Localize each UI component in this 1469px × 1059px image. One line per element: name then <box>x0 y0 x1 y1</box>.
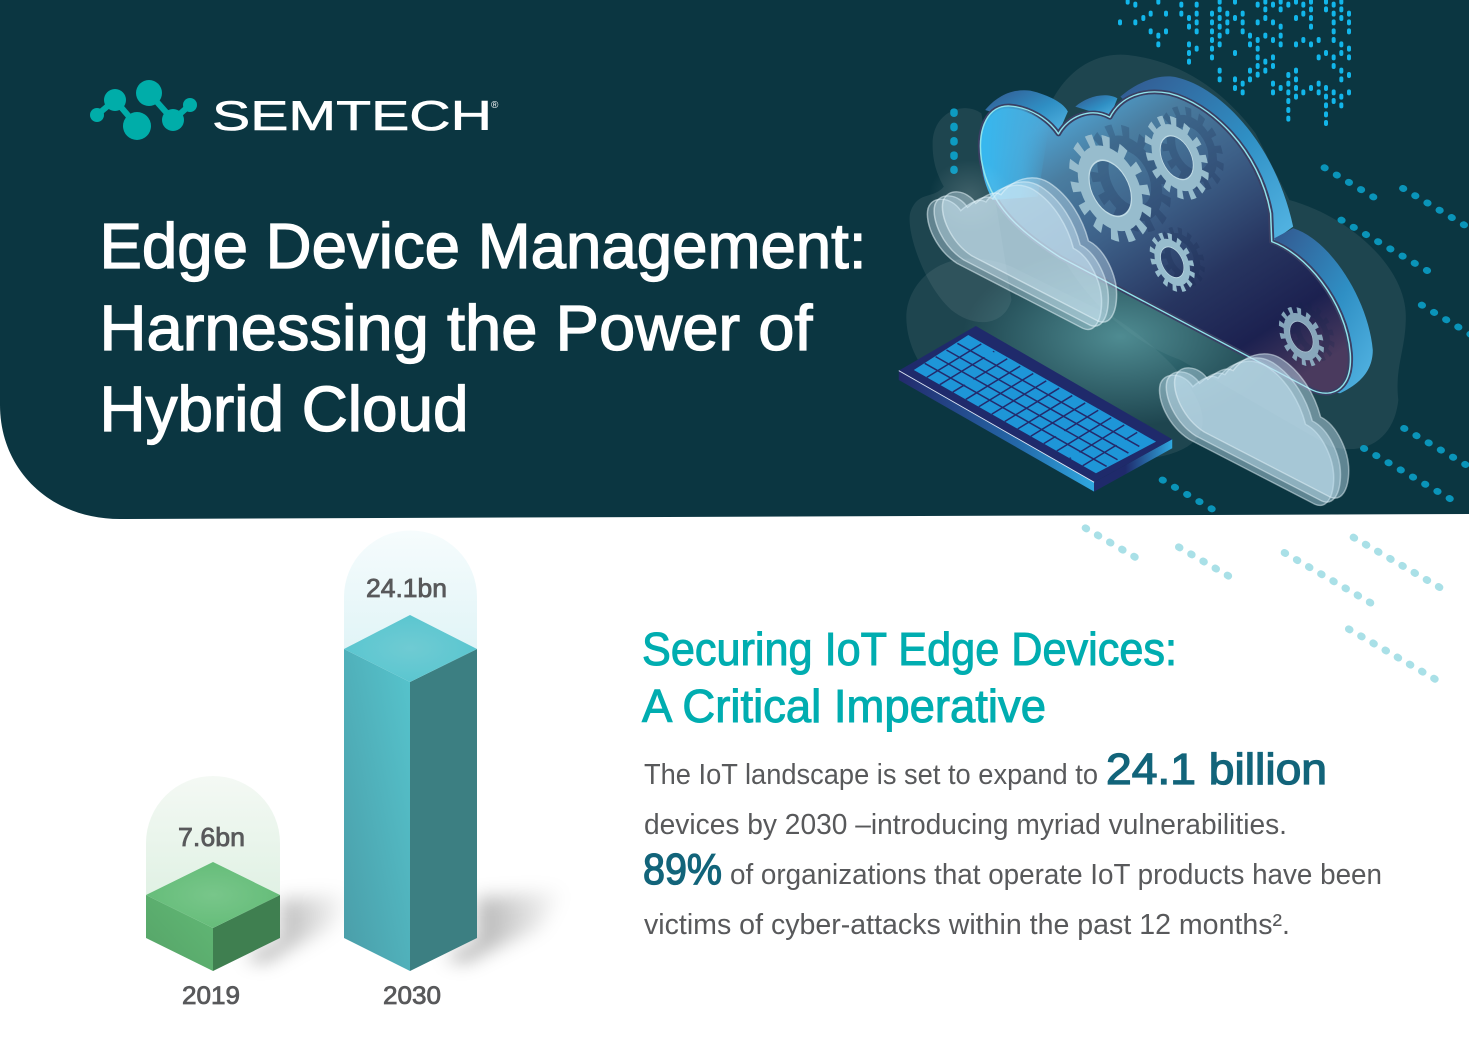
section heading: A Critical Imperative <box>642 680 1046 732</box>
bar 2019 <box>146 776 350 1010</box>
cloud: bright left lobe <box>980 106 1049 200</box>
cloud: extruded side <box>985 76 1373 393</box>
title: Edge Device Management: <box>100 210 866 282</box>
wide keys <box>930 346 1147 471</box>
illustration: hybrid cloud <box>899 55 1469 509</box>
stat: 24.1 billion: 24.1 billion <box>1106 745 1327 794</box>
value: 24.1bn <box>366 573 447 603</box>
dome <box>146 776 280 928</box>
bar shadow <box>445 890 565 962</box>
keyboard <box>899 326 1172 492</box>
year: 2019 <box>182 982 240 1010</box>
registered mark: ® <box>491 100 499 111</box>
logo: Semtech <box>90 80 499 140</box>
wordmark: SEMTECH <box>212 92 492 139</box>
cloud: front face <box>980 92 1350 393</box>
light dots below header <box>1085 528 1441 680</box>
dome <box>344 530 477 682</box>
title <box>100 210 866 445</box>
title: Harnessing the Power of <box>100 292 813 364</box>
body text with statistics: devices by 2030 –introducing myriad vulnerabilities. <box>644 809 1287 841</box>
bar 2030 <box>344 530 565 1010</box>
bar shadow <box>245 893 350 962</box>
bar chart: IoT devices <box>146 530 565 1010</box>
year: 2030 <box>383 982 441 1010</box>
cloud: outline <box>980 92 1350 393</box>
header background <box>0 0 1469 519</box>
icon: molecule mark <box>90 80 197 140</box>
value: 7.6bn <box>178 822 245 852</box>
section heading <box>642 623 1177 732</box>
small cloud: left <box>927 160 1117 329</box>
body text with statistics: The IoT landscape is set to expand to <box>644 759 1098 791</box>
gears <box>1074 100 1332 371</box>
data rain dots <box>1120 1 1349 124</box>
body text with statistics: of organizations that operate IoT products have been <box>730 859 1382 891</box>
body text with statistics <box>643 745 1382 941</box>
title: Hybrid Cloud <box>100 373 468 445</box>
data dots: diagonal streams <box>1162 168 1469 509</box>
data dots: left column <box>944 112 964 171</box>
body text with statistics: victims of cyber-attacks within the past 12 months². <box>644 909 1290 941</box>
teal glow under cloud <box>963 247 1278 427</box>
small cloud: right <box>1160 354 1349 505</box>
stat: 89%: 89% <box>643 845 722 894</box>
section heading: Securing IoT Edge Devices: <box>642 623 1177 675</box>
translucent glow blobs <box>906 55 1406 459</box>
